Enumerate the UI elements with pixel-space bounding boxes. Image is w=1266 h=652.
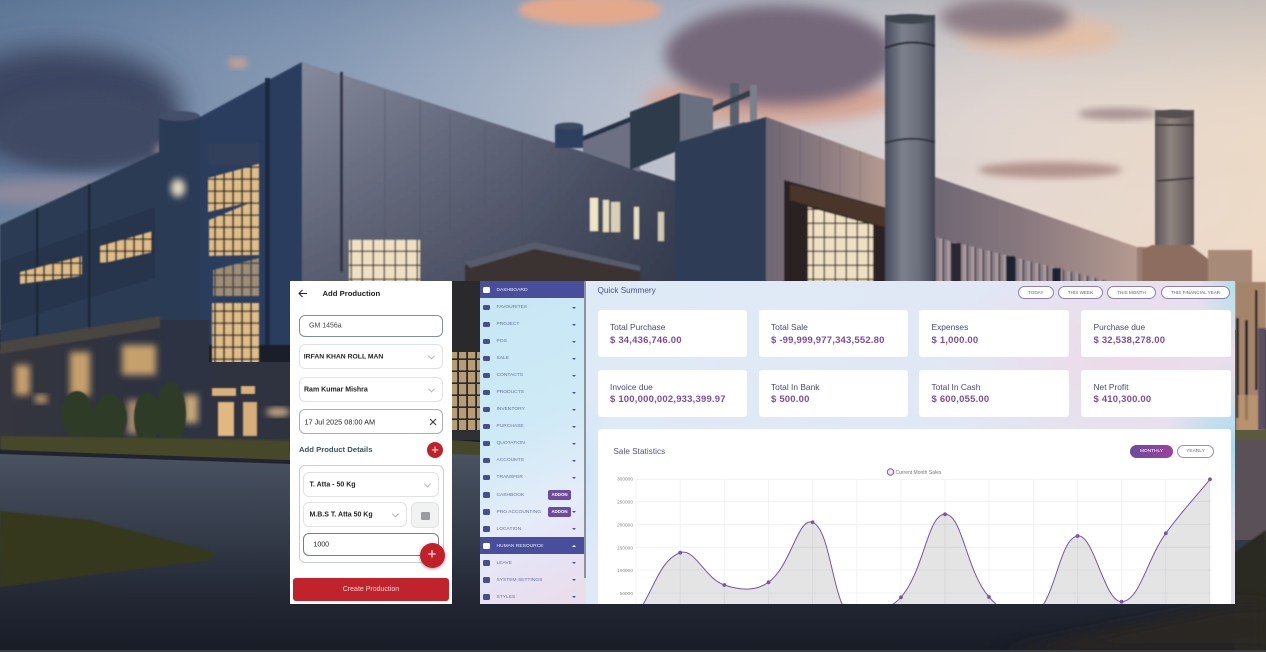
menu item: sale [483, 356, 576, 361]
menu item: purchase: PURCHASE [496, 424, 524, 429]
menu item: cashbook: CASHBOOK [496, 493, 524, 498]
card: expenses: $ 1,000.00 [932, 334, 978, 346]
menu item: favourites [483, 305, 576, 310]
card: total in cash [919, 370, 1069, 416]
y axis labels: 200000 [617, 522, 633, 528]
card: total in bank: Total In Bank [771, 382, 819, 392]
factory building [0, 14, 1266, 432]
menu item: dashboard [480, 281, 584, 298]
menu item: styles: STYLES [496, 595, 515, 600]
card: purchase due: Purchase due [1094, 322, 1145, 332]
menu item: dashboard: DASHBOARD [496, 288, 527, 293]
button: add product: + [431, 442, 439, 456]
card: total purchase [598, 310, 746, 357]
heading: add production: Add Production [322, 289, 380, 298]
button: create production [293, 578, 449, 601]
menu item: contacts [483, 373, 576, 378]
field: variant select: M.B.S T. Atta 50 Kg [310, 511, 373, 518]
canopy [0, 242, 640, 354]
road and grass [0, 281, 1266, 652]
y axis labels [617, 476, 633, 597]
card: total purchase: Total Purchase [610, 322, 665, 332]
menu item: quotation [483, 441, 576, 446]
filter: this week [1058, 286, 1103, 298]
menu item: accounts: ACCOUNTS [496, 458, 524, 463]
button: create production: Create Production [343, 586, 399, 593]
menu item: contacts: CONTACTS [496, 373, 523, 378]
menu item: cashbook [483, 490, 571, 500]
menu item: project [483, 322, 576, 327]
menu item: products: PRODUCTS [496, 390, 524, 395]
card: total purchase: $ 34,436,746.00 [610, 334, 682, 346]
menu item: sale: SALE [496, 356, 509, 361]
heading: sale statistics: Sale Statistics [614, 447, 665, 456]
menu item: transfer [483, 475, 576, 480]
filter: this financial year: THIS FINANCIAL YEAR [1171, 290, 1220, 294]
sales area and line [636, 479, 1210, 619]
menu item: location [483, 526, 576, 532]
field: production code [299, 315, 443, 337]
field: variant select [303, 502, 407, 527]
card: expenses: Expenses [932, 322, 968, 332]
filter: this week: THIS WEEK [1068, 290, 1093, 294]
card: invoice due: Invoice due [610, 382, 653, 392]
panel: sidebar navigation [480, 281, 586, 604]
field: quantity: 1000 [314, 541, 329, 548]
data points [678, 477, 1212, 604]
panel: dashboard main [586, 281, 1235, 604]
card: purchase due: $ 32,538,278.00 [1094, 334, 1165, 346]
scrollbar [584, 281, 586, 578]
filter: this financial year [1161, 286, 1230, 298]
card: invoice due [598, 370, 746, 416]
card: total sale [758, 310, 908, 357]
menu item: leave: LEAVE [496, 561, 512, 566]
field: quantity [303, 533, 439, 556]
menu item: system settings [483, 577, 576, 583]
card: net profit [1081, 370, 1230, 416]
menu item: cashbook: ADDON [551, 492, 568, 496]
card: total sale: $ -99,999,977,343,552.80 [771, 334, 885, 346]
menu item: favourites: FAVOURITES [496, 305, 527, 310]
field: product select: T. Atta - 50 Kg [310, 481, 356, 488]
menu item: human resource: HUMAN RESOURCE [496, 544, 544, 549]
field: supervisor select [299, 377, 443, 402]
button: floating add: + [428, 546, 436, 562]
heading: quick summery: Quick Summery [598, 286, 656, 295]
card: net profit: Net Profit [1094, 382, 1128, 392]
card: total in cash: Total In Cash [932, 382, 980, 392]
menu item: transfer: TRANSFER [496, 475, 523, 480]
card: net profit: $ 410,300.00 [1094, 394, 1151, 405]
grid [636, 479, 1210, 604]
menu item: leave [483, 560, 576, 566]
menu item: project: PROJECT [496, 322, 519, 327]
menu item: styles [483, 594, 576, 600]
field: employee select: IRFAN KHAN ROLL MAN [304, 353, 383, 360]
card: sale statistics [598, 429, 1230, 604]
card: purchase due [1081, 310, 1230, 357]
card: total sale: Total Sale [771, 322, 808, 332]
button: add product [427, 442, 443, 458]
menu item: products [483, 390, 576, 395]
tower windows [20, 143, 259, 363]
field: date time: 17 Jul 2025 08:00 AM [304, 417, 375, 426]
menu item: pro accounting: PRO ACCOUNTING [496, 510, 541, 515]
field: product select [303, 472, 439, 497]
menu item: pos: POS [496, 339, 507, 344]
lower facade with lit windows [0, 320, 299, 440]
field: supervisor select: Ram Kumar Mishra [304, 386, 368, 393]
menu item: location: LOCATION [496, 527, 521, 532]
menu item: inventory [483, 407, 576, 412]
filter: this month [1107, 286, 1156, 298]
sky with clouds [0, 0, 1266, 330]
y axis labels: 150000 [617, 546, 633, 552]
heading: add product details: Add Product Details [299, 445, 372, 454]
field: employee select [299, 344, 443, 369]
toggle: yearly [1177, 445, 1214, 458]
chart: current month sales area chart [617, 468, 1212, 604]
card: total in cash: $ 600,055.00 [932, 394, 989, 405]
toggle: monthly [1130, 445, 1173, 458]
y axis labels: 300000 [617, 476, 633, 482]
panel: mobile add production form [290, 281, 452, 604]
group: product details [298, 465, 444, 563]
bushes [61, 382, 186, 446]
menu item: quotation: QUOTATION [496, 441, 525, 446]
toggle: yearly: YEARLY [1186, 449, 1205, 454]
y axis labels: 100000 [617, 568, 633, 574]
menu item: human resource [480, 537, 584, 554]
y axis labels: 50000 [620, 591, 633, 597]
card: total in bank [758, 370, 908, 416]
menu item: pos [483, 339, 576, 344]
card: invoice due: $ 100,000,002,933,399.97 [610, 394, 726, 405]
field: date time [299, 409, 443, 434]
filter: today [1018, 286, 1054, 298]
legend: Current Month Sales [896, 470, 942, 476]
icon: unit box [411, 502, 439, 528]
icon: back arrow [298, 290, 307, 298]
filter: this month: THIS MONTH [1117, 290, 1146, 294]
card: expenses [919, 310, 1069, 357]
toggle: monthly: MONTHLY [1140, 449, 1163, 454]
filter: today: TODAY [1028, 290, 1043, 294]
menu item: pro accounting [483, 507, 576, 517]
field: production code: GM 1456a [309, 322, 342, 330]
menu item: system settings: SYSTEM SETTINGS [496, 578, 542, 583]
card: total in bank: $ 500.00 [771, 394, 810, 405]
menu item: accounts [483, 458, 576, 463]
button: floating add [420, 542, 444, 568]
y axis labels: 250000 [617, 500, 633, 506]
menu item: pro accounting: ADDON [551, 508, 568, 514]
menu item: inventory: INVENTORY [496, 407, 525, 412]
menu item: purchase [483, 424, 576, 429]
